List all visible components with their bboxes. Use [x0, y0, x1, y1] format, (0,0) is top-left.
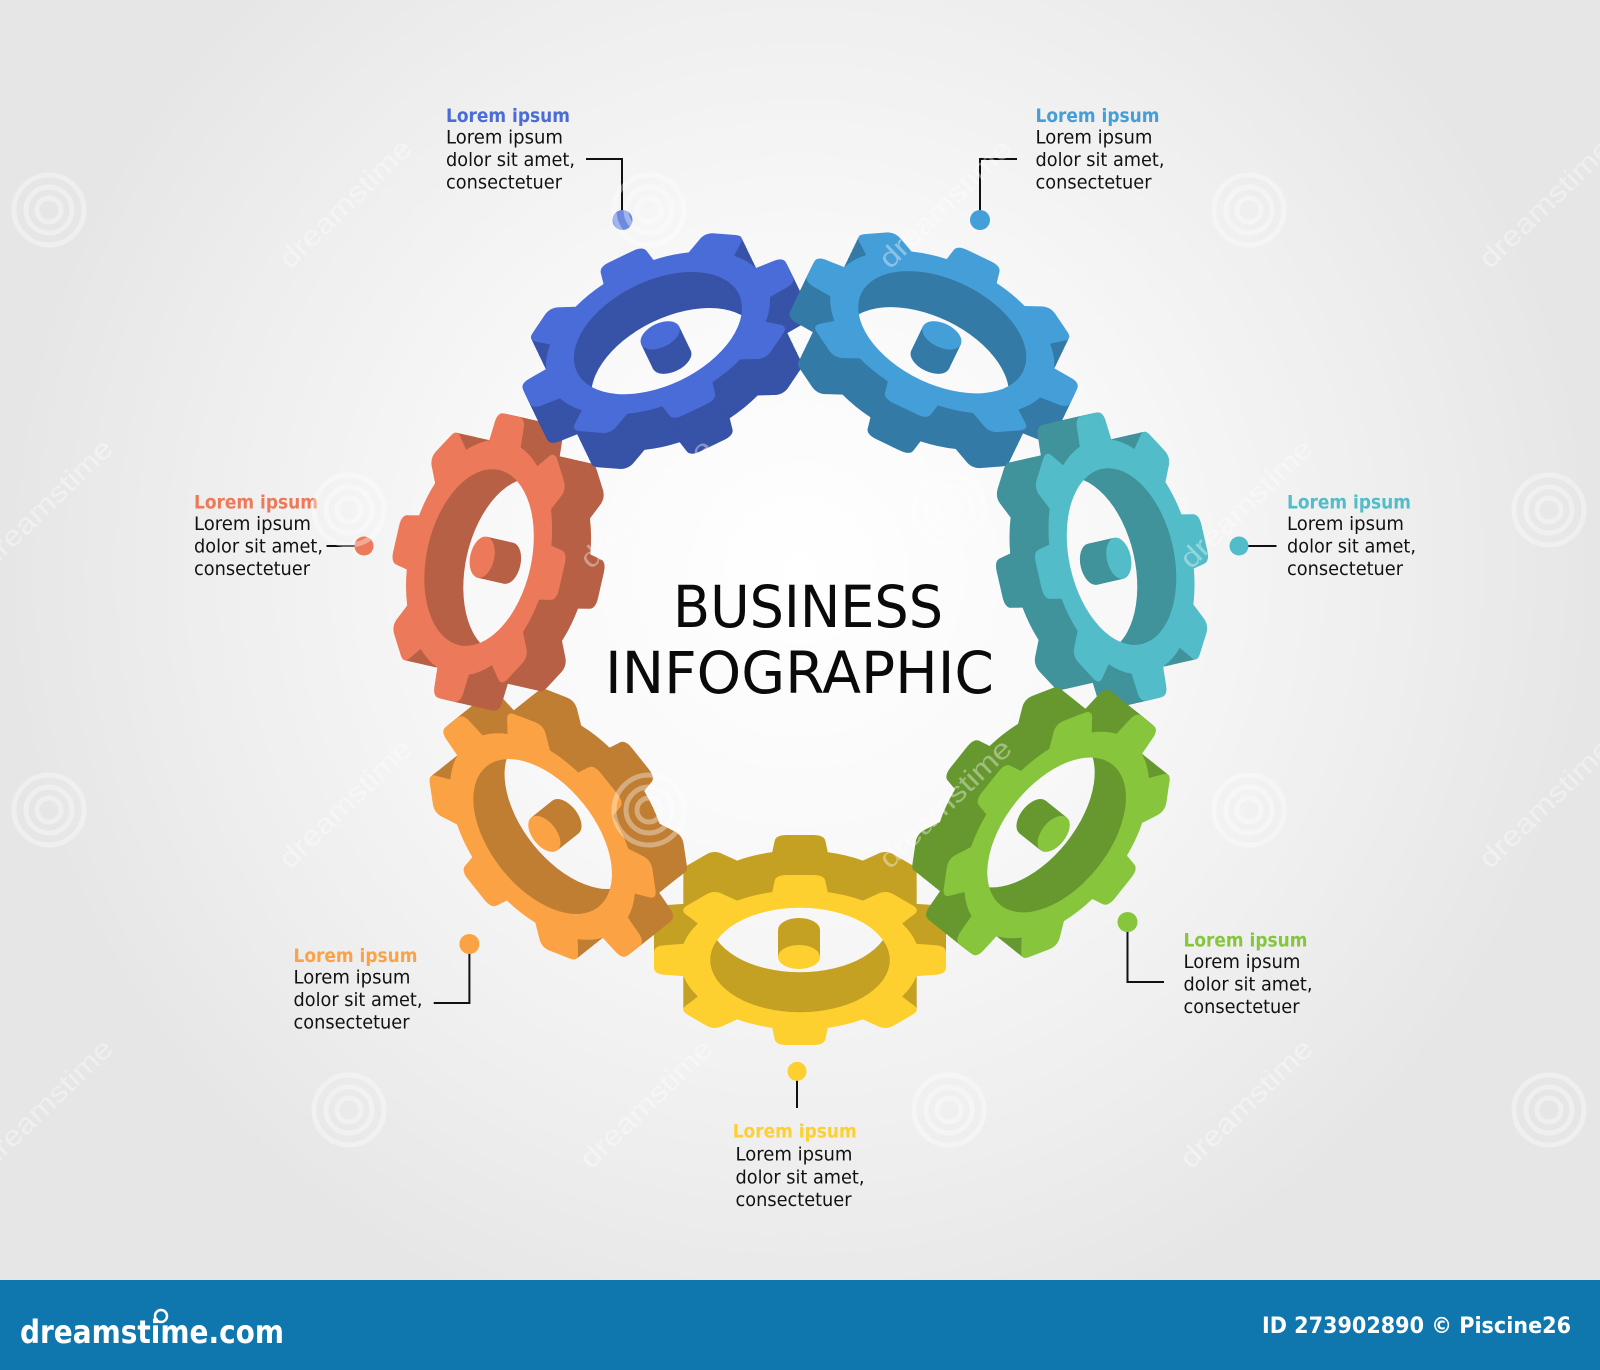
callout: coral red — [194, 492, 374, 580]
callout: sky blue — [970, 105, 1164, 230]
title: BUSINESS — [673, 573, 943, 641]
callout: sky blue: dolor sit amet, — [1036, 149, 1164, 171]
gear: orange — [385, 644, 731, 1004]
watermark: dreamstime — [273, 133, 418, 274]
callout: yellow — [733, 1062, 864, 1211]
title: INFOGRAPHIC — [605, 639, 994, 707]
watermark: dreamstime — [873, 133, 1018, 274]
callout: royal blue — [446, 105, 632, 230]
footer bar: ID 273902890 © Piscine26 — [1262, 1314, 1571, 1339]
callout: teal: Lorem ipsum — [1287, 513, 1404, 535]
callout: orange — [294, 934, 479, 1034]
callout: yellow: dolor sit amet, — [736, 1166, 864, 1188]
gear: green — [868, 643, 1214, 1002]
watermark: dreamstime — [574, 433, 719, 574]
gear: royal blue — [490, 193, 844, 509]
watermark: dreamstime — [1473, 733, 1600, 874]
callout: coral red: Lorem ipsum — [194, 492, 318, 514]
gear: teal — [967, 395, 1237, 727]
footer bar: dreamstime.com — [20, 1313, 284, 1351]
callout: sky blue: consectetuer — [1036, 172, 1152, 194]
callout: green: Lorem ipsum — [1184, 951, 1300, 973]
callout: green: Lorem ipsum — [1184, 930, 1308, 952]
callout: green — [1118, 912, 1312, 1018]
callout: green: dolor sit amet, — [1184, 973, 1312, 995]
callout: coral red: dolor sit amet, — [194, 536, 323, 558]
callout: teal: consectetuer — [1287, 558, 1403, 580]
watermark: dreamstime — [1473, 133, 1600, 274]
gear: coral red — [364, 396, 633, 728]
title — [605, 573, 994, 707]
footer bar — [0, 1280, 1600, 1370]
callout: orange: consectetuer — [294, 1012, 410, 1034]
callout: yellow: consectetuer — [736, 1189, 852, 1211]
gear: yellow — [654, 835, 946, 1045]
gear: sky blue — [756, 192, 1111, 508]
callout: coral red: Lorem ipsum — [194, 513, 311, 535]
callout: sky blue: Lorem ipsum — [1036, 126, 1152, 148]
callout: orange: dolor sit amet, — [294, 989, 422, 1011]
callout: sky blue: Lorem ipsum — [1036, 105, 1160, 127]
callout: royal blue: consectetuer — [446, 172, 562, 194]
callout: orange: Lorem ipsum — [294, 966, 410, 988]
callout: royal blue: Lorem ipsum — [446, 126, 563, 148]
callout: coral red: consectetuer — [194, 558, 310, 580]
watermark: dreamstime — [1174, 1033, 1319, 1174]
callout: yellow: Lorem ipsum — [733, 1120, 857, 1142]
callout: teal: dolor sit amet, — [1287, 536, 1416, 558]
watermark: dreamstime — [574, 1033, 719, 1174]
watermark: dreamstime — [873, 733, 1018, 874]
watermark: dreamstime — [1174, 433, 1319, 574]
watermark: dreamstime — [273, 733, 418, 874]
callout: yellow: Lorem ipsum — [736, 1144, 852, 1166]
callout: royal blue: Lorem ipsum — [446, 105, 570, 127]
watermark — [0, 133, 1600, 1174]
callout: orange: Lorem ipsum — [294, 945, 418, 967]
callout: royal blue: dolor sit amet, — [446, 149, 575, 171]
callout: green: consectetuer — [1184, 996, 1300, 1018]
callout: teal — [1230, 492, 1416, 580]
callout: teal: Lorem ipsum — [1287, 492, 1411, 514]
